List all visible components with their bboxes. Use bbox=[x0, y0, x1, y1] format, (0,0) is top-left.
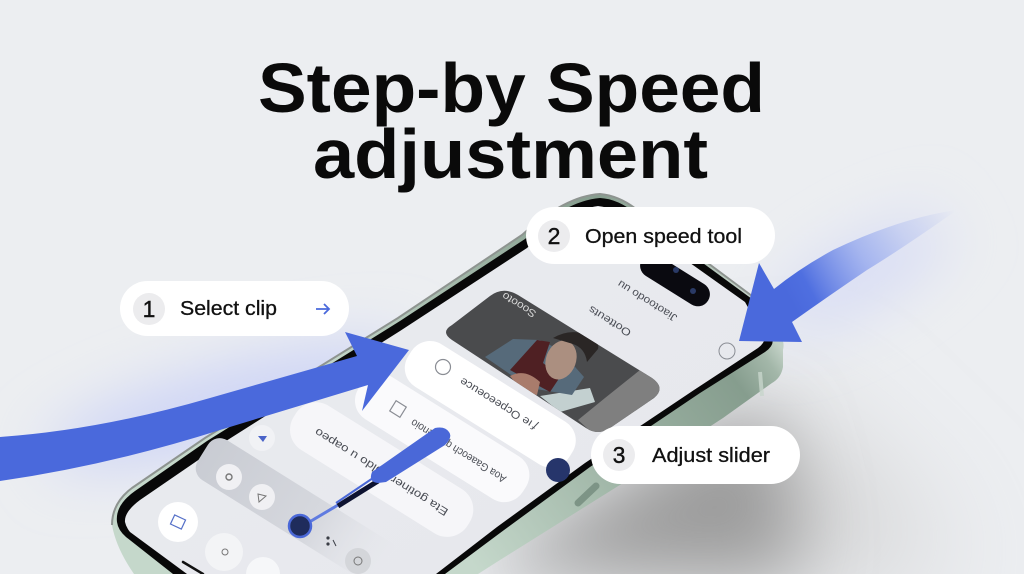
screen labels bbox=[587, 277, 680, 339]
title: adjustment bbox=[313, 115, 708, 193]
band highlight bbox=[760, 372, 762, 396]
upper-left edge shading bbox=[112, 194, 752, 525]
speaker slot bbox=[183, 562, 203, 574]
arrow: right, pointing to phone corner bbox=[739, 210, 957, 342]
video thumbnail bbox=[446, 290, 660, 432]
option card 3 bbox=[281, 393, 482, 546]
title bbox=[258, 49, 765, 193]
person: scarf bbox=[510, 340, 560, 392]
step 2 pill: Open speed tool bbox=[585, 225, 742, 248]
step 1 pill bbox=[120, 281, 349, 336]
step 1 pill: Select clip bbox=[180, 297, 277, 320]
person: hands bbox=[510, 373, 540, 395]
control icons bbox=[158, 343, 735, 574]
step 3 pill: Adjust slider bbox=[652, 444, 770, 467]
dynamic island bbox=[636, 249, 714, 311]
option card 1 bbox=[396, 333, 584, 476]
step 2 pill bbox=[526, 207, 775, 264]
person: jacket bbox=[485, 339, 584, 395]
phone frame bbox=[112, 194, 784, 574]
step 1 pill: 1 bbox=[143, 296, 155, 322]
option icons bbox=[390, 360, 450, 417]
screen labels: Ootteuts bbox=[587, 303, 634, 339]
phone bbox=[112, 194, 784, 574]
slider thumb bbox=[371, 428, 450, 483]
slider bbox=[289, 428, 450, 537]
black bezel bbox=[117, 198, 773, 574]
title: Step-by Speed bbox=[258, 49, 765, 127]
option card 2 bbox=[347, 365, 538, 510]
arrow: left, pointing to clip bbox=[0, 332, 409, 481]
option texts: Aoa Gaaeoch qa leenoio bbox=[409, 416, 509, 485]
side button bbox=[578, 486, 596, 503]
person: face bbox=[545, 340, 577, 380]
screen labels: Jiaotoodo uu bbox=[615, 277, 680, 324]
photo background wall bbox=[578, 370, 660, 432]
option texts bbox=[313, 375, 541, 518]
step 3 pill bbox=[591, 426, 800, 484]
person: cloth bbox=[540, 388, 595, 412]
step 3 pill: 3 bbox=[613, 442, 625, 468]
option texts: ƒıe Ocpeeoeuce bbox=[458, 375, 541, 433]
screen bbox=[125, 206, 764, 574]
person: hair bbox=[553, 332, 598, 362]
thumbnail label: Soooto bbox=[500, 289, 539, 320]
gray control panel bbox=[190, 433, 402, 574]
option texts: Eta gotinere oldo u oapeo bbox=[313, 425, 451, 518]
icon: small arrow bbox=[316, 304, 329, 314]
step 2 pill: 2 bbox=[548, 223, 560, 249]
speed option list bbox=[281, 298, 584, 572]
